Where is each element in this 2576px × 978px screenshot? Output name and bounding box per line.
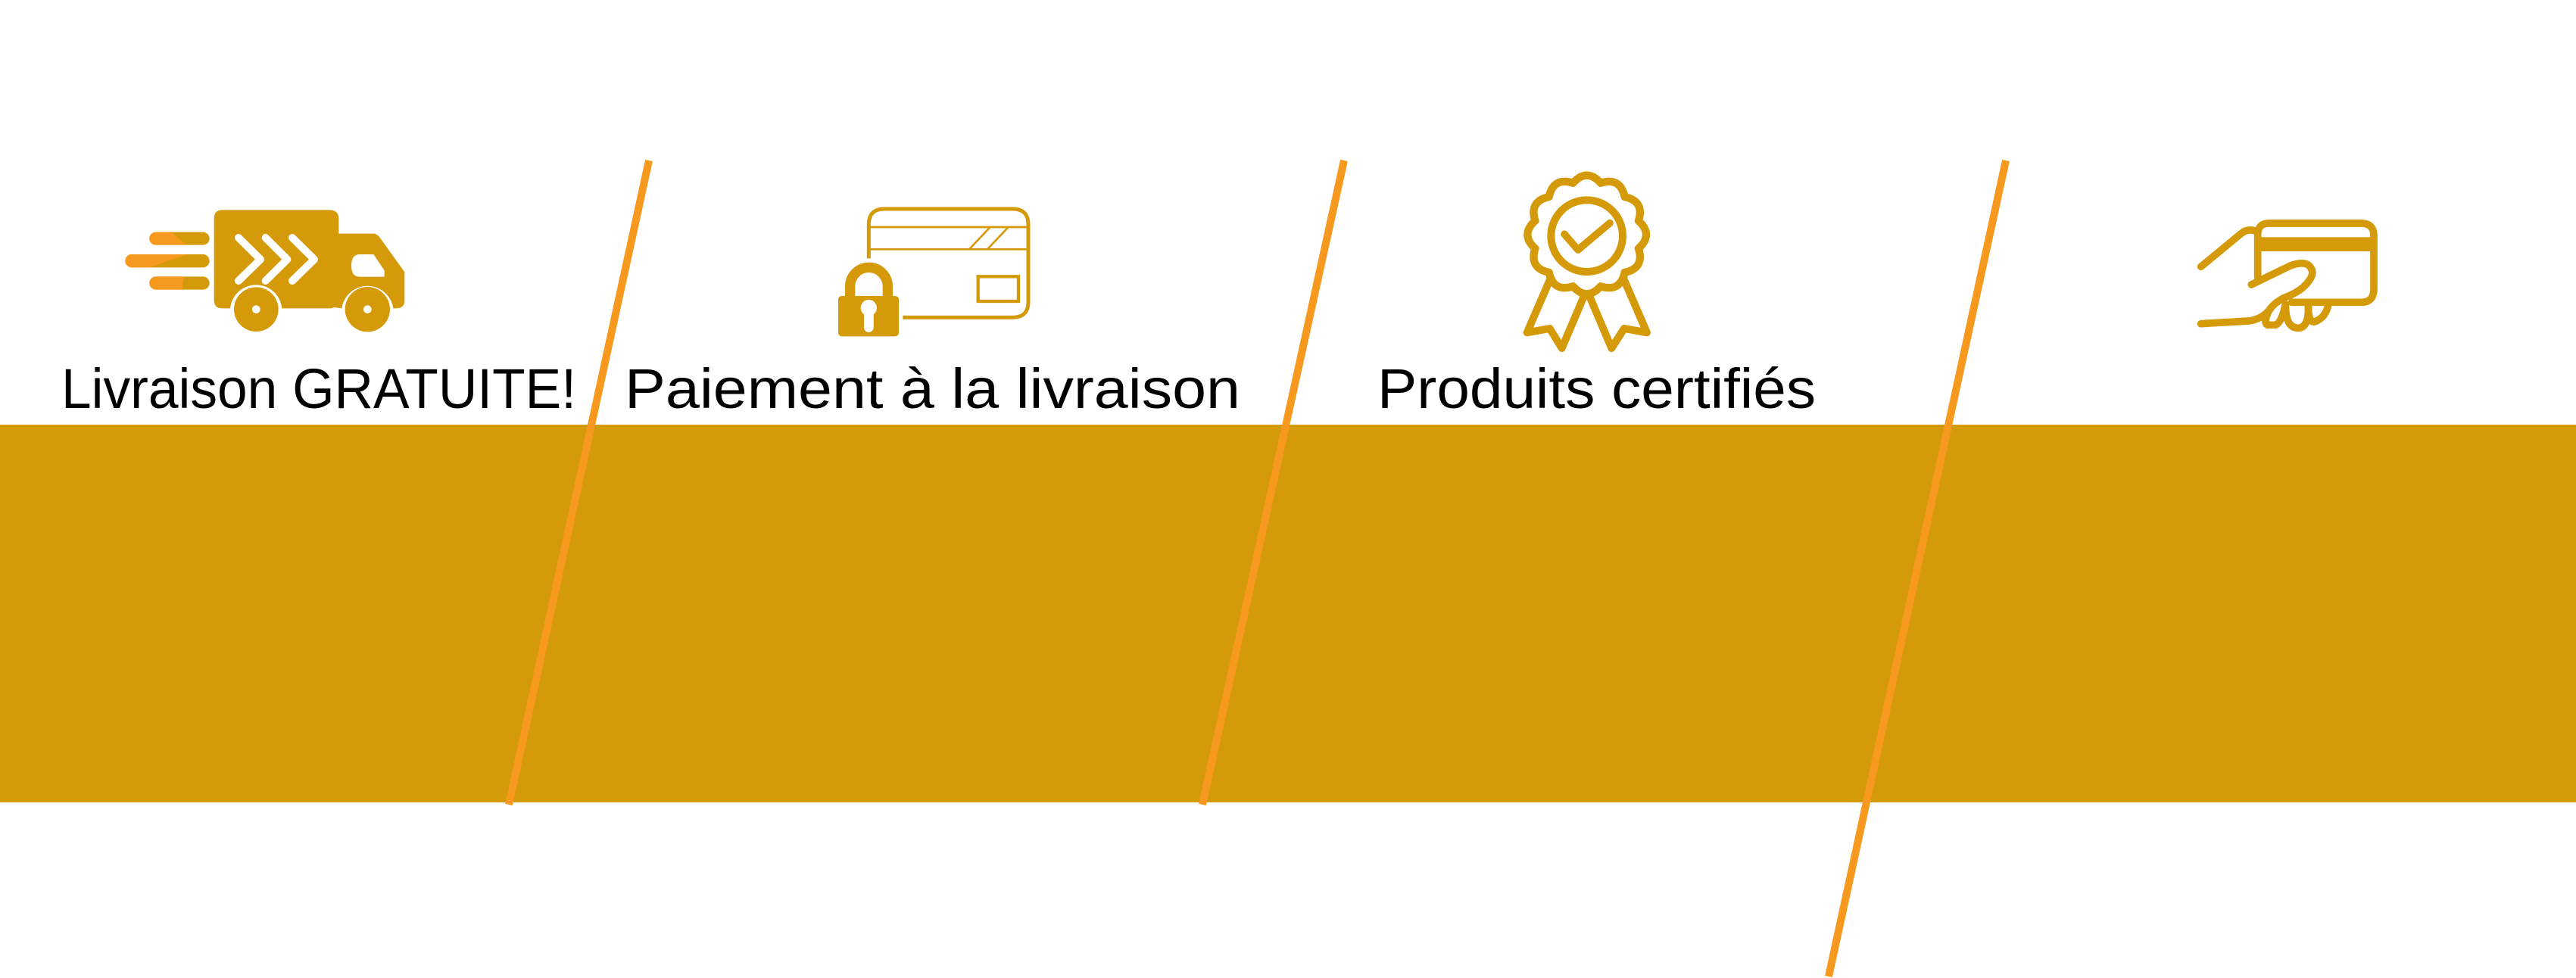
label: cash on delivery: Paiement à la livraison (625, 357, 1240, 420)
icon: delivery truck (125, 210, 404, 332)
icon: credit card with padlock (838, 209, 1028, 336)
label: free delivery: Livraison GRATUITE! (61, 357, 576, 420)
icon: hand holding card (2201, 223, 2374, 328)
slanted divider 2 (1202, 160, 1344, 805)
label: certified products: Produits certifiés (1377, 357, 1816, 420)
icon: certification rosette (1527, 176, 1647, 348)
gold band (0, 425, 2576, 802)
slanted divider 1 (509, 160, 649, 805)
slanted divider 3 (1829, 160, 2006, 976)
